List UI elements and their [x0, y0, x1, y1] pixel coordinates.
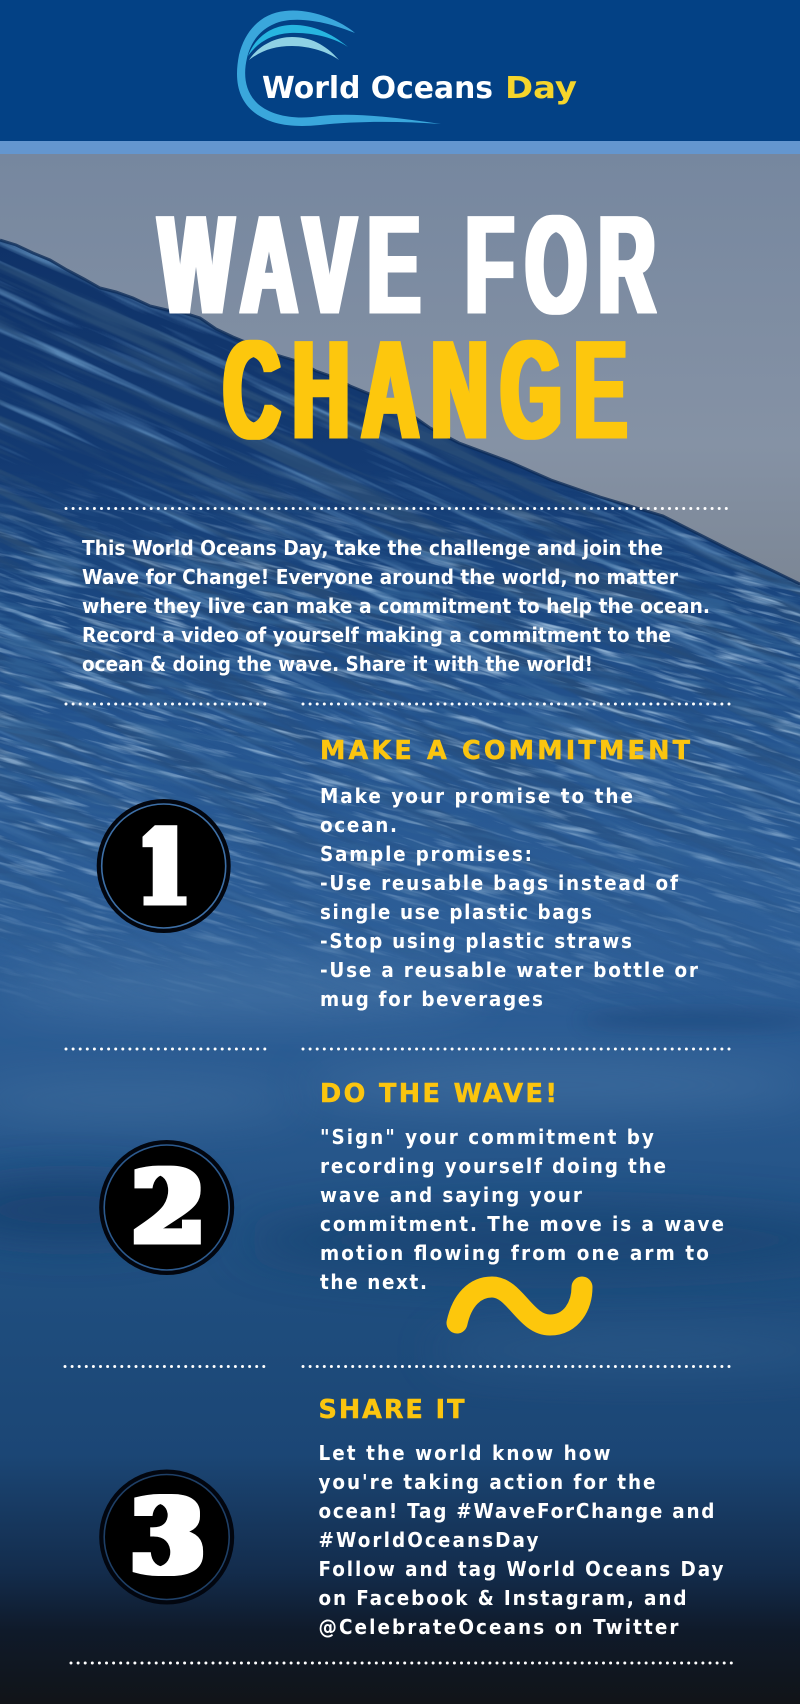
numeral 2: 2 — [133, 1148, 204, 1268]
step 1 text: mug for beverages — [320, 987, 543, 1011]
title line 2: CHANGE — [223, 312, 627, 469]
numeral 1: 1 — [140, 807, 187, 929]
step 1 badge — [97, 799, 231, 933]
step 3 text: Let the world know how — [319, 1441, 611, 1465]
step 1 text: single use plastic bags — [320, 900, 592, 924]
step 1 text: Sample promises: — [320, 842, 532, 866]
logo wave swoosh — [237, 11, 441, 126]
step 3 text — [319, 1441, 724, 1639]
step 2 text: the next. — [320, 1270, 427, 1294]
step 3 text: Follow and tag World Oceans Day — [319, 1557, 724, 1581]
step 2 heading: DO THE WAVE! — [320, 1079, 557, 1109]
numeral 3: 3 — [131, 1475, 204, 1598]
step 1 text: ocean. — [320, 813, 397, 837]
step 1 text: Make your promise to the — [320, 784, 633, 808]
step 1 text: -Use reusable bags instead of — [320, 871, 679, 895]
step 2 text: motion flowing from one arm to — [320, 1241, 709, 1265]
logo word Day: Day — [505, 71, 577, 106]
step 3 badge — [99, 1470, 234, 1604]
step 2 text: wave and saying your — [320, 1183, 582, 1207]
logo wordmark: World Oceans — [262, 71, 493, 106]
logo: World Oceans Day — [237, 11, 577, 126]
step 1 text: -Use a reusable water bottle or — [320, 958, 698, 982]
intro paragraph: where they live can make a commitment to help the ocean. — [82, 594, 710, 618]
step 2 badge — [99, 1140, 234, 1275]
intro paragraph: This World Oceans Day, take the challenge and join the — [82, 536, 663, 560]
icon: wave squiggle — [457, 1287, 582, 1325]
step 1 heading: MAKE A COMMITMENT — [320, 736, 691, 766]
header band — [0, 0, 800, 141]
intro paragraph — [82, 536, 710, 676]
step 3 text: on Facebook & Instagram, and — [319, 1586, 687, 1610]
step 3 heading: SHARE IT — [318, 1395, 465, 1425]
step 3 text: you're taking action for the — [319, 1470, 655, 1494]
step 3 text: #WorldOceansDay — [319, 1528, 539, 1552]
title line 1: WAVE FOR — [159, 187, 655, 344]
step 2 text: "Sign" your commitment by — [320, 1125, 654, 1149]
wave crest edge — [0, 240, 800, 584]
intro paragraph: ocean & doing the wave. Share it with the world! — [82, 652, 593, 676]
title: WAVE FOR CHANGE — [159, 187, 655, 469]
step 3 text: ocean! Tag #WaveForChange and — [319, 1499, 714, 1523]
step 2 text — [320, 1125, 724, 1294]
intro paragraph: Wave for Change! Everyone around the world, no matter — [82, 565, 678, 589]
step 1 text: -Stop using plastic straws — [320, 929, 632, 953]
header accent stripe — [0, 141, 800, 154]
step 1 text — [320, 784, 698, 1011]
step 3 text: @CelebrateOceans on Twitter — [319, 1615, 679, 1639]
intro paragraph: Record a video of yourself making a commitment to the — [82, 623, 671, 647]
step 2 text: recording yourself doing the — [320, 1154, 666, 1178]
step 2 text: commitment. The move is a wave — [320, 1212, 724, 1236]
